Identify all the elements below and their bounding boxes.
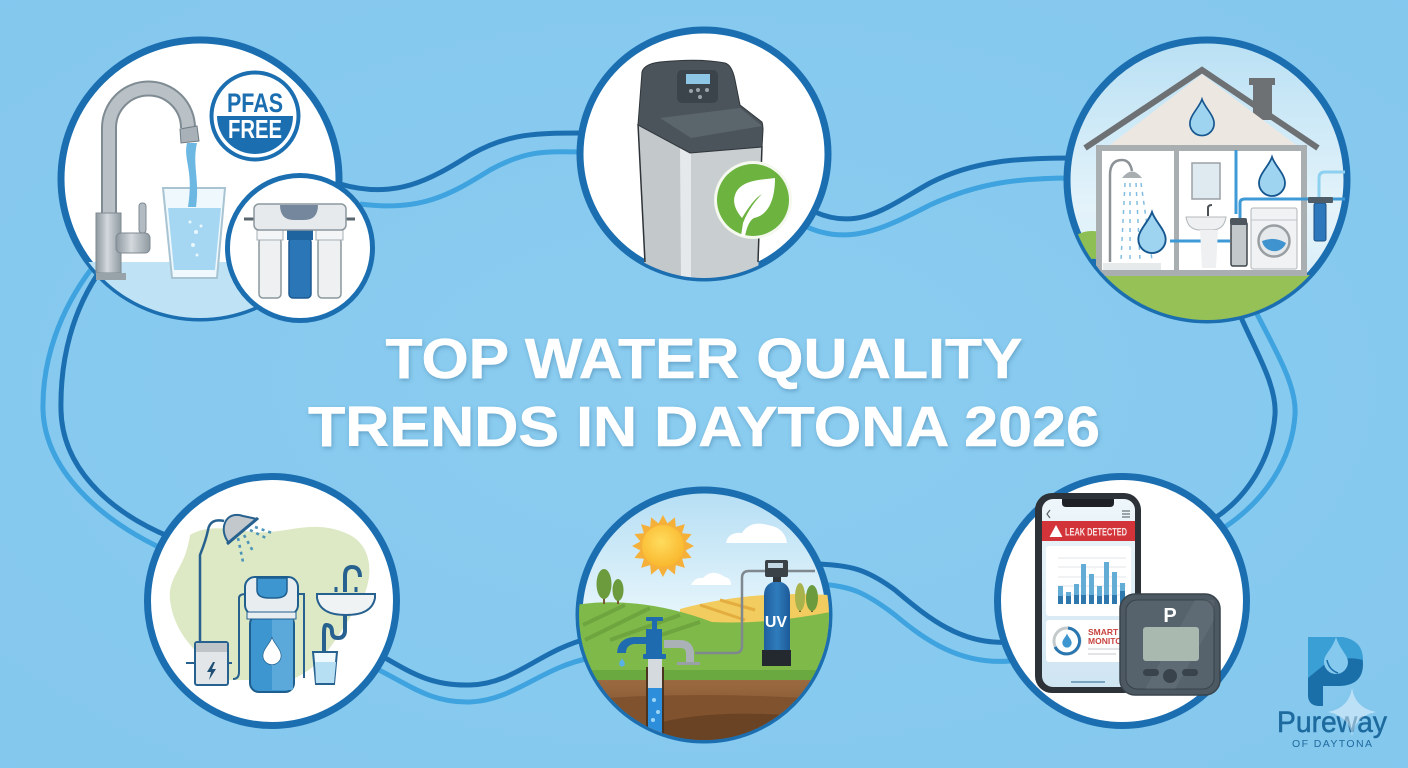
- connector: dark wave: [61, 133, 1275, 685]
- panel: whole-home filtration: [1060, 40, 1360, 330]
- badge: PFAS free: PFAS: [227, 88, 283, 118]
- icon: water softener tank: [233, 577, 304, 692]
- title: TOP WATER QUALITY: [386, 327, 1022, 391]
- icon: shower: [1110, 160, 1152, 262]
- badge: PFAS free: [212, 72, 298, 160]
- icon: washing machine: [1251, 208, 1297, 269]
- green blob: [170, 527, 369, 680]
- smart monitor card: SMART: [1088, 627, 1119, 637]
- icon: mirror and sink: [1186, 163, 1226, 268]
- icon: sink and glass: [313, 567, 375, 684]
- icon: well pipe: [646, 659, 664, 734]
- bush and lawn: [1078, 231, 1310, 320]
- logo: Pureway of Daytona: OF DAYTONA: [1292, 738, 1372, 750]
- icon: softener cabinet: [638, 60, 763, 280]
- icon: silver pipe: [664, 571, 815, 664]
- smart monitor card: [1046, 620, 1131, 662]
- badge: PFAS free: FREE: [228, 114, 282, 144]
- icon: monitor device: P: [1163, 605, 1177, 627]
- smart monitor card: MONITOR: [1088, 636, 1128, 646]
- icon: leaf badge: [714, 161, 792, 239]
- trees: [596, 569, 818, 612]
- title: [308, 327, 1100, 459]
- panel: smart leak monitoring: [998, 476, 1246, 726]
- clouds: [691, 524, 787, 585]
- icon: water pipes: [1170, 199, 1345, 241]
- connector: light wave: [43, 152, 1295, 702]
- alert banner: LEAK DETECTED: [1065, 526, 1127, 538]
- icon: UV tank: [762, 560, 791, 666]
- title: TRENDS IN DAYTONA 2026: [308, 395, 1100, 459]
- icon: blue spigot: [617, 617, 666, 667]
- inset: under-sink filter: [228, 176, 372, 320]
- icon: sediment filter: [1230, 218, 1247, 266]
- hills: [575, 594, 840, 682]
- icon: inlet filter: [1308, 172, 1345, 241]
- icon: glass of water: [163, 143, 225, 278]
- panel: energy-efficient water system: [148, 476, 396, 726]
- icon: chimney: [1249, 78, 1275, 120]
- alert banner: [1042, 521, 1135, 541]
- icon: faucet: [96, 88, 199, 280]
- logo: Pureway of Daytona: Pureway: [1277, 706, 1387, 739]
- icon: sun: [632, 515, 694, 577]
- icon: water drops: [1138, 99, 1285, 253]
- icon: power box: [186, 642, 232, 685]
- counter surface: [88, 262, 254, 318]
- panel: rural well water UV: [575, 490, 840, 751]
- icon: UV tank: UV: [765, 614, 787, 631]
- icon: smartphone: [1035, 493, 1141, 693]
- icon: shower head: [200, 515, 272, 642]
- bar chart: [1046, 546, 1131, 616]
- soil layers: [597, 680, 811, 740]
- icon: monitor device: [1120, 594, 1220, 695]
- logo: Pureway of Daytona: [1277, 637, 1387, 750]
- panel: PFAS-free drinking water: [50, 40, 372, 332]
- icon: house: [1085, 70, 1318, 273]
- panel: eco water softener: [580, 30, 828, 280]
